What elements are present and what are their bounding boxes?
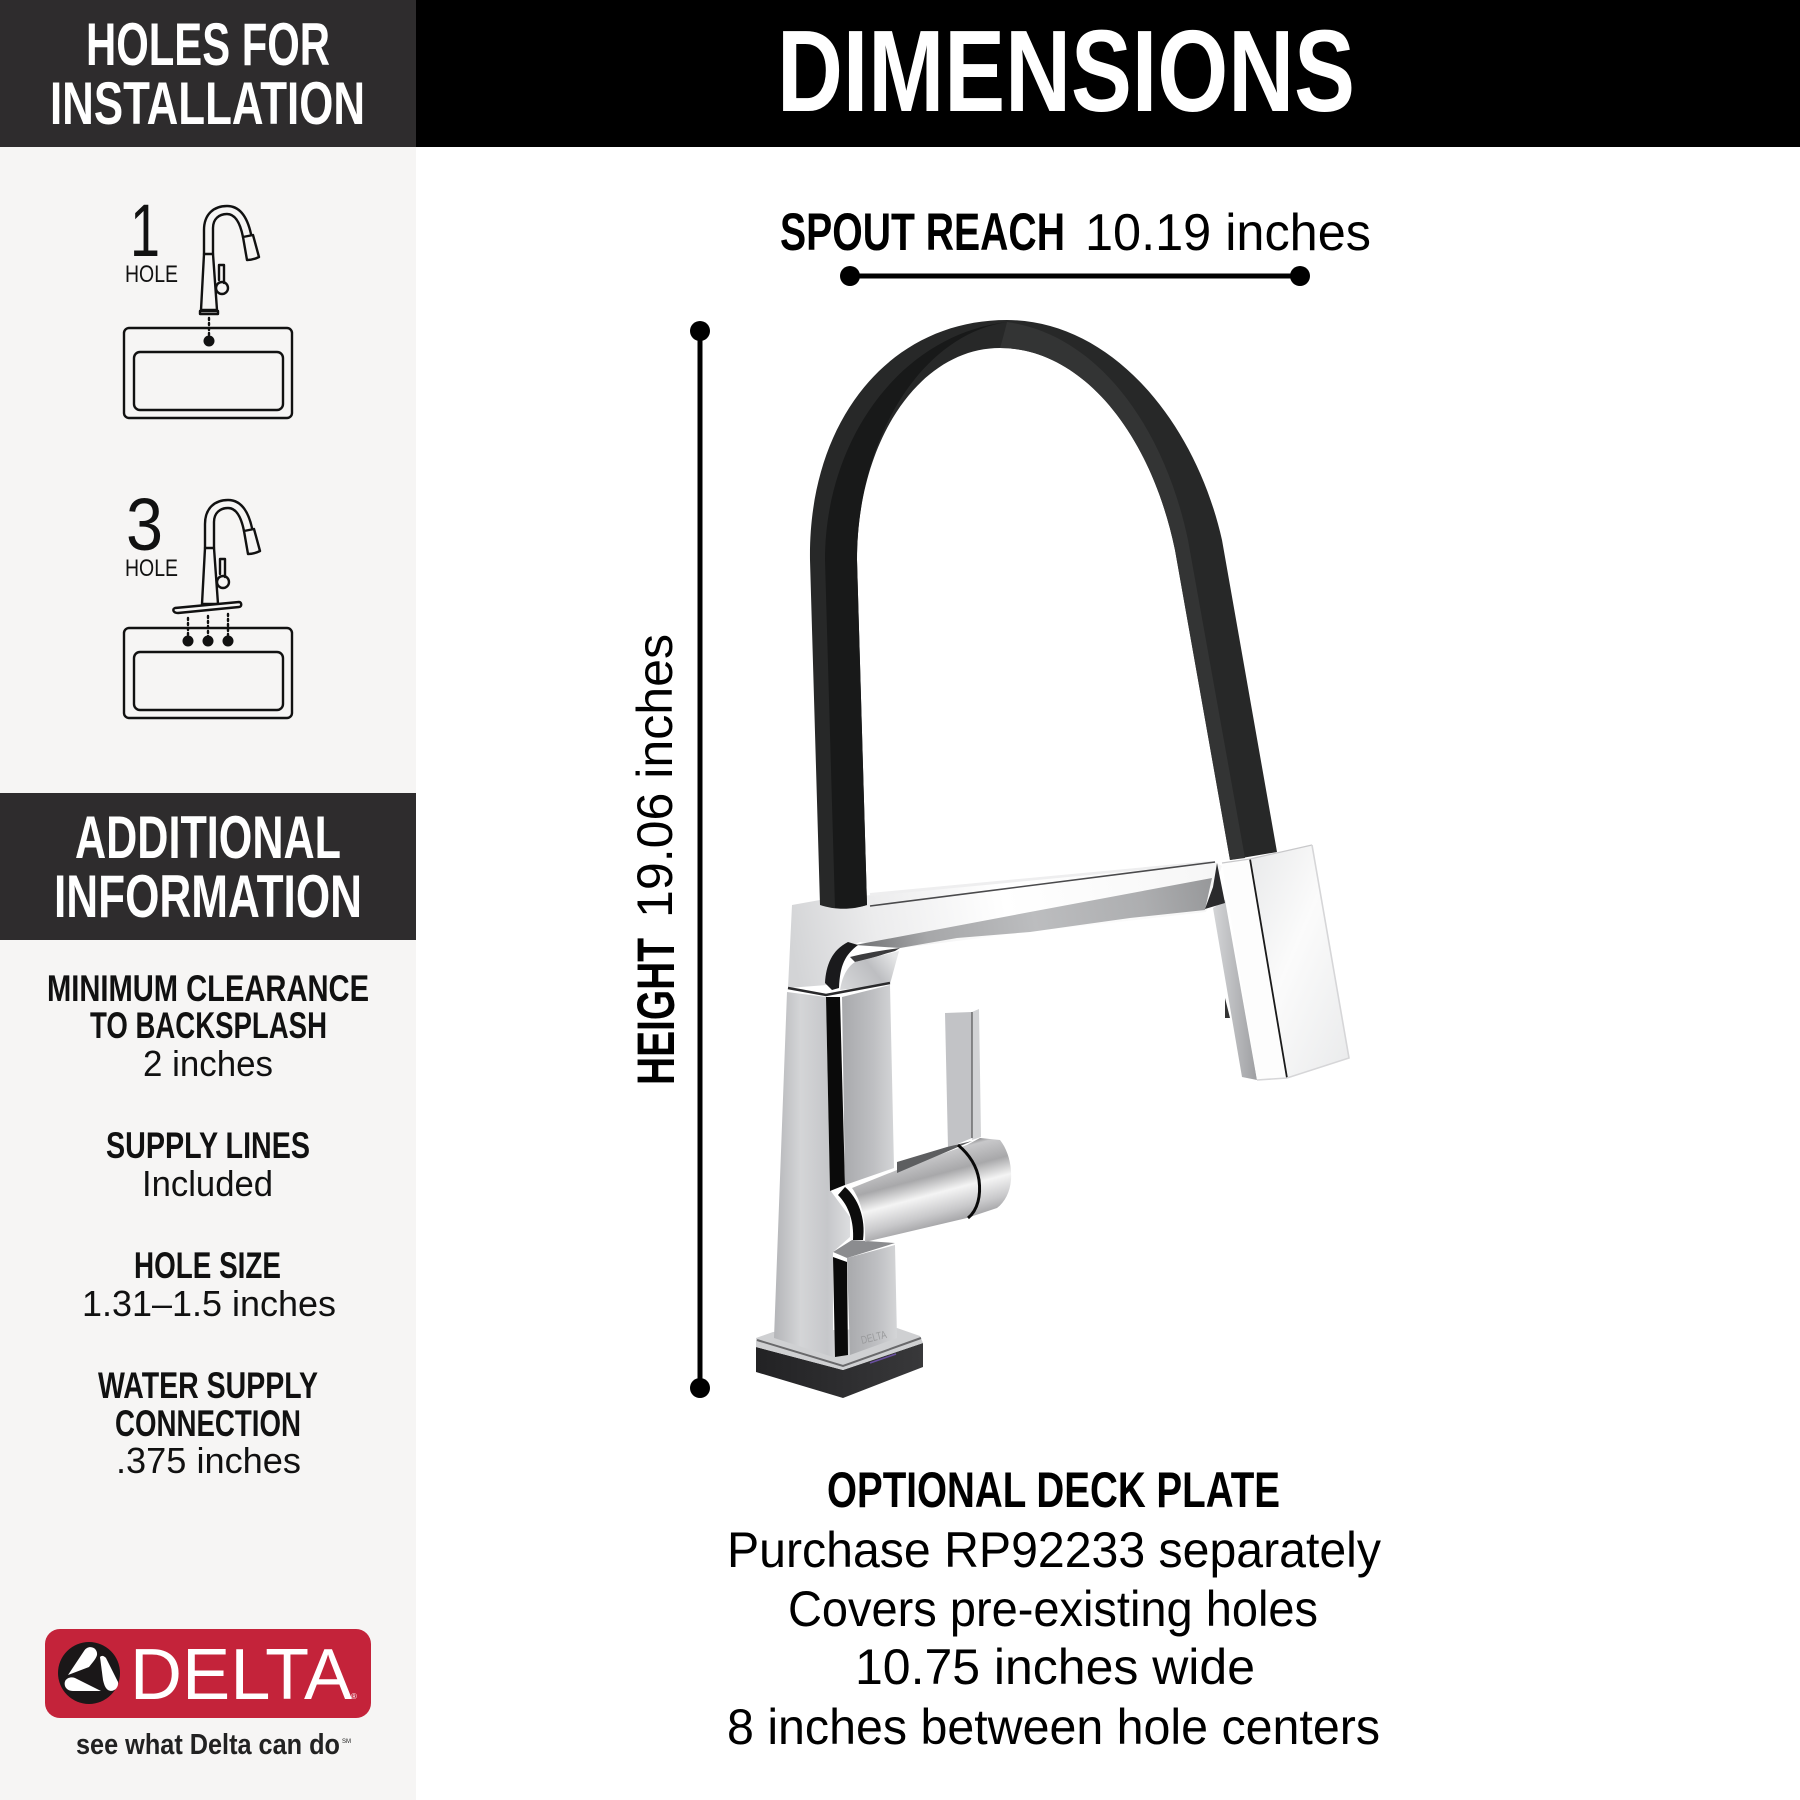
sidebar panel — [0, 0, 416, 1800]
dimension: height: HEIGHT — [627, 938, 686, 1085]
logo: Delta: DELTA — [130, 1635, 352, 1715]
faucet base — [756, 1328, 923, 1398]
neck — [840, 951, 899, 990]
handle cylinder — [838, 1138, 1011, 1242]
text: optional deck plate: 8 inches between hole centers — [727, 1699, 1380, 1755]
black strips — [826, 997, 848, 1357]
text: supply lines: Included — [142, 1163, 273, 1204]
dimension: spout reach — [780, 203, 1371, 286]
header: holes for installation: HOLES FOR — [86, 11, 330, 78]
icon: one hole installation: 1 — [130, 189, 160, 272]
logo: Delta: SM — [342, 1739, 351, 1745]
text: optional deck plate: Purchase RP92233 separately — [727, 1522, 1381, 1578]
text: supply lines — [106, 1125, 310, 1204]
text: water supply connection — [98, 1365, 318, 1481]
right faces — [842, 985, 894, 1185]
header: dimensions — [416, 0, 1800, 147]
text: optional deck plate: OPTIONAL DECK PLATE — [827, 1462, 1280, 1518]
text: optional deck plate: 10.75 inches wide — [855, 1639, 1255, 1695]
icon: one hole installation — [124, 189, 292, 418]
header: additional information: ADDITIONAL — [75, 804, 341, 871]
dimension: spout reach: SPOUT REACH — [780, 203, 1065, 262]
lever — [945, 1009, 981, 1148]
header: holes for installation — [0, 0, 416, 147]
logo: Delta — [45, 1629, 371, 1761]
dimension: spout reach: 10.19 inches — [1085, 204, 1371, 262]
text: water supply connection: CONNECTION — [115, 1403, 301, 1444]
header: additional information — [0, 793, 416, 940]
spray head — [1222, 845, 1349, 1080]
left face — [774, 992, 850, 1357]
text: minimum clearance: MINIMUM CLEARANCE — [47, 968, 369, 1009]
header: holes for installation: INSTALLATION — [50, 70, 365, 137]
text: hole size: HOLE SIZE — [134, 1245, 281, 1286]
text: optional deck plate — [727, 1462, 1381, 1755]
black hose — [810, 320, 1277, 909]
header: dimensions: DIMENSIONS — [777, 6, 1355, 136]
header: additional information: INFORMATION — [54, 863, 362, 930]
text: water supply connection: .375 inches — [116, 1440, 301, 1481]
text: minimum clearance: 2 inches — [143, 1043, 273, 1084]
text: optional deck plate: Covers pre-existing holes — [788, 1581, 1318, 1637]
icon: one hole installation: HOLE — [125, 261, 178, 288]
spray back panel — [1213, 900, 1257, 1080]
faucet body — [774, 985, 1011, 1357]
logo: Delta: see what Delta can do — [76, 1729, 340, 1761]
maker mark: DELTA — [860, 1329, 888, 1347]
text: water supply connection: WATER SUPPLY — [98, 1365, 318, 1406]
dimension: height: 19.06 inches — [627, 634, 683, 918]
faucet product image — [756, 320, 1349, 1398]
text: hole size — [82, 1245, 336, 1324]
dimension: height — [627, 321, 710, 1398]
chrome arm — [788, 861, 1225, 988]
icon: three hole installation — [124, 483, 292, 718]
icon: three hole installation: HOLE — [125, 555, 178, 582]
text: minimum clearance: TO BACKSPLASH — [90, 1005, 327, 1046]
text: supply lines: SUPPLY LINES — [106, 1125, 310, 1166]
text: hole size: 1.31–1.5 inches — [82, 1283, 336, 1324]
lower joint — [833, 1240, 895, 1258]
icon: three hole installation: 3 — [126, 483, 163, 566]
text: minimum clearance — [47, 968, 369, 1084]
logo: Delta: ® — [351, 1692, 357, 1701]
